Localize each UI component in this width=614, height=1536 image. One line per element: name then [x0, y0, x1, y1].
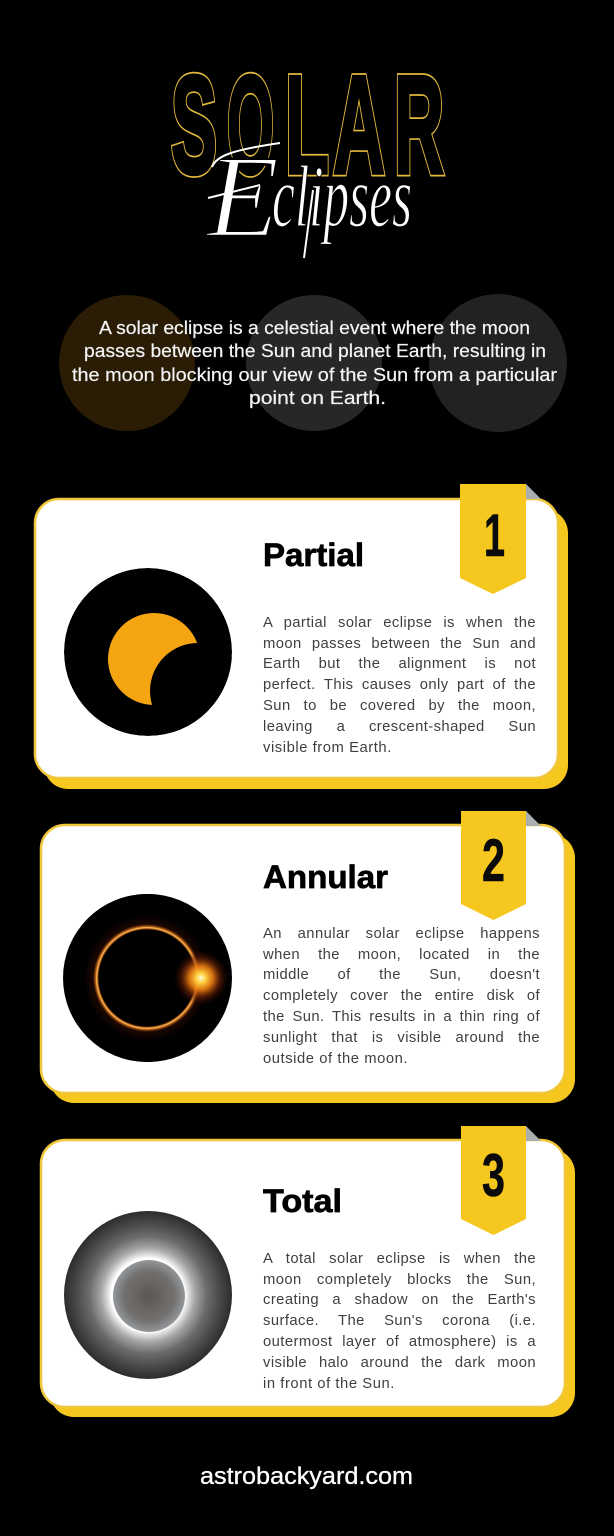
image: partial eclipse — [64, 568, 246, 739]
fold 2 — [526, 811, 541, 826]
title: Solar: O — [227, 46, 274, 203]
intro paragraph: passes between the Sun and planet Earth, resulting in — [84, 341, 546, 361]
text: annular description: when the moon, located in the — [263, 947, 540, 963]
footer url: astrobackyard.com — [200, 1463, 413, 1490]
text: annular description: An annular solar eclipse happens — [263, 926, 540, 942]
background circle: sun — [59, 295, 195, 431]
card 1 — [35, 484, 568, 789]
text: R — [394, 46, 444, 203]
text: total description: creating a shadow on the Earth's — [263, 1292, 536, 1308]
text: total description: A total solar eclipse is when the — [263, 1251, 536, 1267]
text: total description: surface. The Sun's corona (i.e. — [263, 1313, 536, 1329]
number 3: 3 — [482, 1142, 505, 1209]
text: total description: outermost layer of atmosphere) is a — [263, 1334, 536, 1350]
text: annular description: completely cover the entire disk of — [263, 988, 540, 1004]
title: Eclipses — [205, 131, 412, 262]
heading: Annular: Annular — [263, 859, 388, 895]
title: Solar: L — [285, 46, 329, 203]
title: Solar: A — [333, 46, 385, 203]
heading: Total: Total — [263, 1183, 342, 1219]
title: Solar: A — [333, 46, 385, 203]
intro paragraph: A solar eclipse is a celestial event where the moon — [99, 318, 530, 338]
intro paragraph: point on Earth. — [249, 388, 386, 408]
text: partial description: perfect. This causes only part of the — [263, 677, 536, 693]
intro paragraph: the moon blocking our view of the Sun from a particular — [72, 365, 557, 385]
text: partial description: leaving a crescent-shaped Sun — [263, 719, 536, 735]
fold 3 — [526, 1126, 541, 1141]
text: annular description: outside of the moon. — [263, 1051, 408, 1067]
title: Solar: O — [227, 46, 274, 203]
ribbon 3 — [461, 1126, 526, 1235]
card 2 — [41, 811, 575, 1103]
heading: Partial: Partial — [263, 537, 364, 573]
title: Solar: S — [171, 46, 217, 203]
text: total description: in front of the Sun. — [263, 1376, 395, 1392]
text: partial description: visible from Earth. — [263, 740, 392, 756]
ribbon 2 — [461, 811, 526, 920]
text: partial description: moon passes between the Sun and — [263, 636, 536, 652]
image: annular eclipse — [63, 894, 232, 1062]
title: Solar — [171, 46, 444, 203]
fold 1 — [526, 484, 541, 499]
background circle: moon — [246, 295, 382, 431]
text: R — [394, 46, 444, 203]
text: total description: visible halo around the dark moon — [263, 1355, 536, 1371]
title: Solar: L — [285, 46, 329, 203]
text: partial description: Sun to be covered by the moon, — [263, 698, 536, 714]
text: partial description: Earth but the alignment is not — [263, 656, 536, 672]
text: total description: moon completely blocks the Sun, — [263, 1272, 536, 1288]
text: annular description: middle of the Sun, doesn't — [263, 967, 540, 983]
image: total eclipse — [64, 1211, 232, 1379]
intro paragraph — [72, 318, 557, 408]
title: Eclipses: clipses — [272, 149, 412, 246]
ribbon 1 — [460, 484, 526, 594]
title: Solar: S — [171, 46, 217, 203]
title: Eclipses: E — [205, 131, 279, 262]
text: partial description: A partial solar eclipse is when the — [263, 615, 536, 631]
number 2: 2 — [482, 827, 505, 894]
background circle: earth — [429, 294, 567, 432]
card 3 — [41, 1126, 575, 1417]
text: annular description: sunlight that is visible around the — [263, 1030, 540, 1046]
text: annular description: the Sun. This results in a thin ring of — [263, 1009, 540, 1025]
number 1: 1 — [484, 502, 505, 569]
